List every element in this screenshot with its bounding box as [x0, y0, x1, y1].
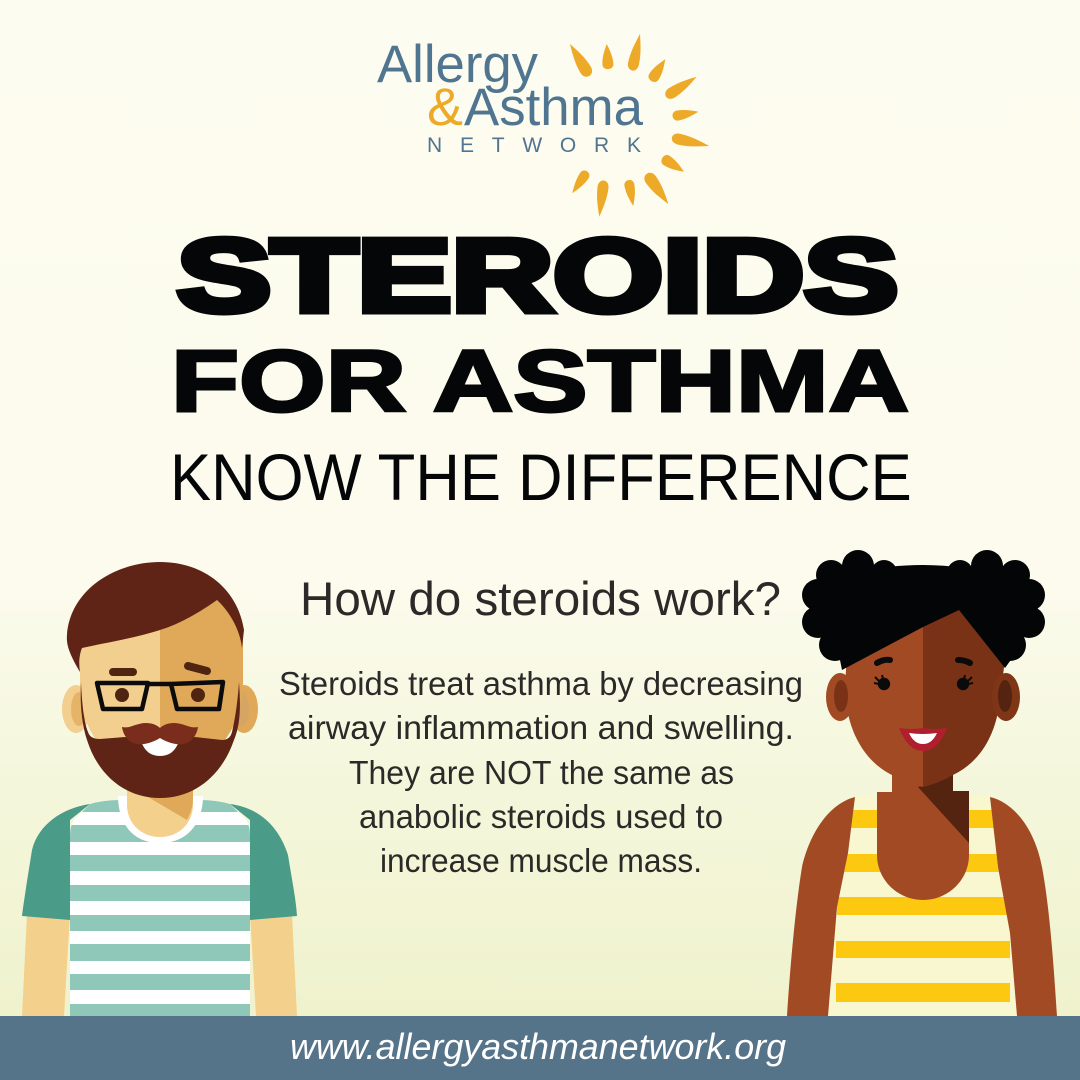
website url: www.allergyasthmanetwork.org [290, 1026, 786, 1067]
man glasses [97, 682, 223, 709]
logo wordmark: Allergy [377, 35, 538, 94]
man ears [62, 685, 258, 733]
man striped shirt [70, 796, 250, 1016]
woman eyes [874, 675, 973, 690]
man neck shadow [148, 790, 193, 820]
logo wordmark: & [427, 78, 463, 137]
title [170, 218, 912, 514]
man sleeves [22, 804, 297, 920]
man arms [22, 914, 297, 1016]
woman eyebrows [877, 660, 970, 663]
subtitle: KNOW THE DIFFERENCE [170, 441, 912, 514]
man mustache [122, 723, 198, 744]
man beard [81, 682, 240, 798]
woman face [845, 600, 1005, 787]
man eyes [115, 688, 205, 702]
woman teeth [909, 733, 937, 744]
woman ears [826, 673, 1020, 721]
question heading: How do steroids work? [300, 572, 781, 625]
woman chest [877, 792, 969, 900]
man hair [67, 562, 244, 672]
body text: Steroids treat asthma by decreasing [279, 665, 803, 702]
woman hair [802, 550, 1045, 670]
man eyebrows [113, 666, 207, 672]
man face [80, 590, 243, 780]
man neck [127, 785, 193, 837]
logo wordmark [377, 35, 644, 157]
woman arms [787, 797, 1057, 1016]
icon: sun rays [565, 33, 711, 217]
woman illustration [787, 550, 1057, 1016]
body text: airway inflammation and swelling. [288, 709, 794, 746]
woman tank top [820, 790, 1025, 1016]
woman lips [899, 728, 947, 751]
footer bar [0, 1016, 1080, 1080]
woman neck shadow [918, 775, 969, 843]
body text: anabolic steroids used to [359, 798, 723, 835]
logo wordmark: Asthma [464, 78, 644, 137]
logo wordmark: NETWORK [427, 134, 641, 157]
title line: FOR ASTHMA: FOR ASTHMA [171, 334, 909, 430]
body text: They are NOT the same as [349, 754, 734, 791]
logo [377, 33, 711, 217]
body text: increase muscle mass. [380, 842, 702, 879]
man illustration [22, 562, 297, 1016]
body text [279, 665, 803, 879]
man mouth [141, 737, 179, 756]
man collar [118, 796, 203, 843]
title line: STEROIDS: STEROIDS [177, 218, 898, 334]
woman neck [892, 770, 953, 794]
woman tank top lower stripes [836, 897, 1010, 1002]
